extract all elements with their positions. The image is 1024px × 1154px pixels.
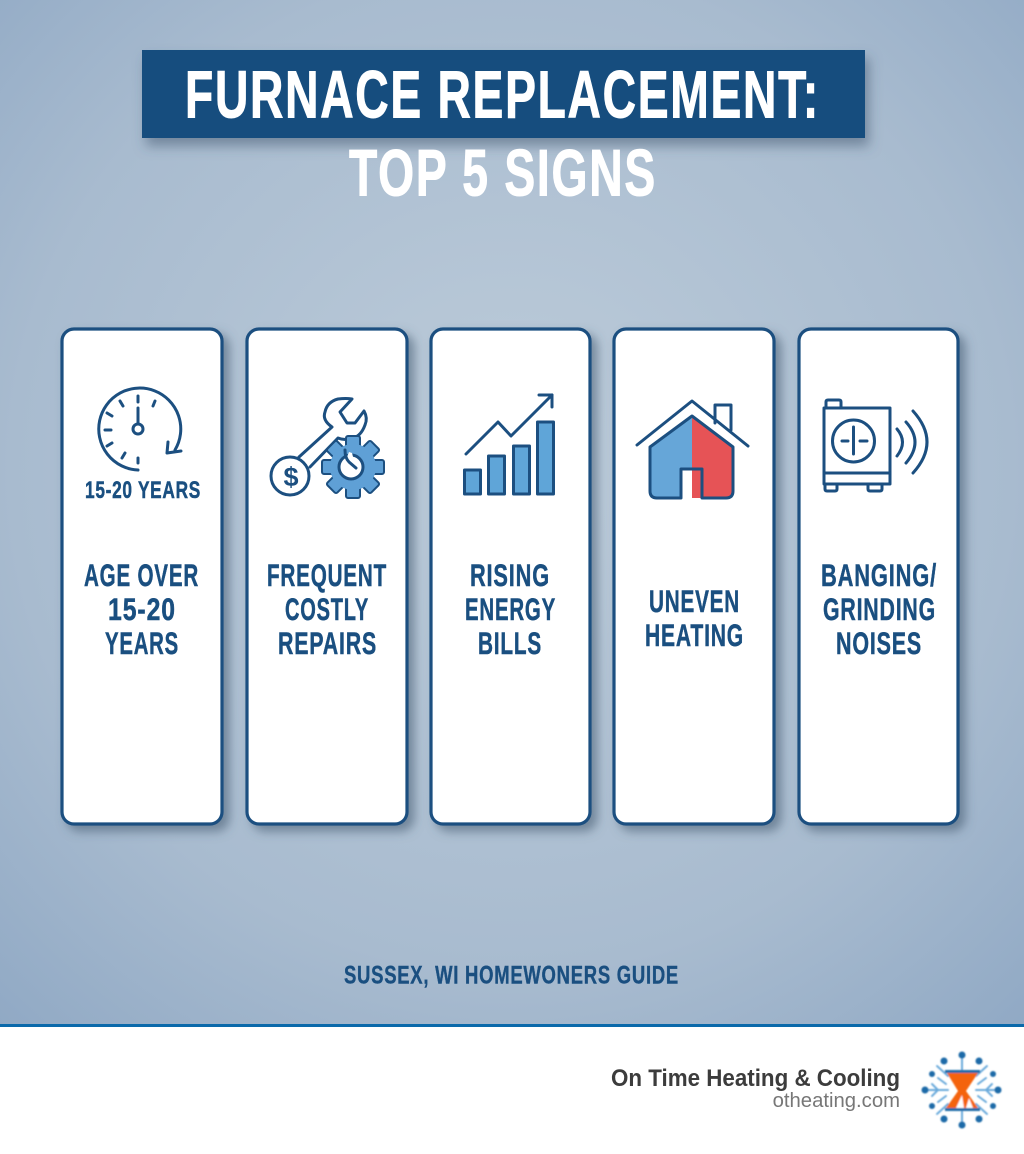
card text: YEARS (105, 625, 179, 661)
icon label: 15-20 YEARS (85, 477, 201, 504)
card text (645, 583, 744, 653)
card text (821, 557, 937, 661)
card text (267, 557, 387, 661)
card text: 15-20 (108, 591, 176, 627)
card text: UNEVEN (649, 583, 740, 619)
caption: SUSSEX, WI HOMEWONERS GUIDE (344, 962, 679, 990)
icon: clock with arrow (99, 388, 181, 470)
icon: wrench, dollar and gear (271, 398, 384, 498)
card text (465, 557, 556, 661)
panel: frequent costly repairs (247, 329, 407, 824)
card text: FREQUENT (267, 557, 387, 593)
title banner (142, 50, 865, 138)
footer (0, 1024, 1024, 1154)
card text: ENERGY (465, 591, 556, 627)
card text: COSTLY (285, 591, 369, 627)
card text: NOISES (836, 625, 922, 661)
card text: RISING (470, 557, 550, 593)
icon: rising bar chart (464, 395, 554, 494)
panel: age over 15-20 years (62, 329, 222, 824)
card text: HEATING (645, 617, 744, 653)
card text: REPAIRS (278, 625, 377, 661)
logo: snowflake with hourglass (922, 1052, 1002, 1128)
card text: BILLS (478, 625, 542, 661)
card text: AGE OVER (84, 557, 199, 593)
panel: rising energy bills (431, 329, 590, 824)
card text: BANGING/ (821, 557, 937, 593)
subtitle: TOP 5 SIGNS (349, 136, 657, 210)
card text (84, 557, 199, 661)
company name: On Time Heating & Cooling (611, 1065, 900, 1092)
website: otheating.com (773, 1090, 900, 1112)
icon: half blue half red house (637, 401, 748, 498)
card text: GRINDING (823, 591, 936, 627)
icon: wrench, dollar and gear: $ (283, 462, 299, 492)
icon: noisy furnace (824, 400, 927, 491)
panel: uneven heating (614, 329, 774, 824)
panel: banging/grinding noises (799, 329, 958, 824)
